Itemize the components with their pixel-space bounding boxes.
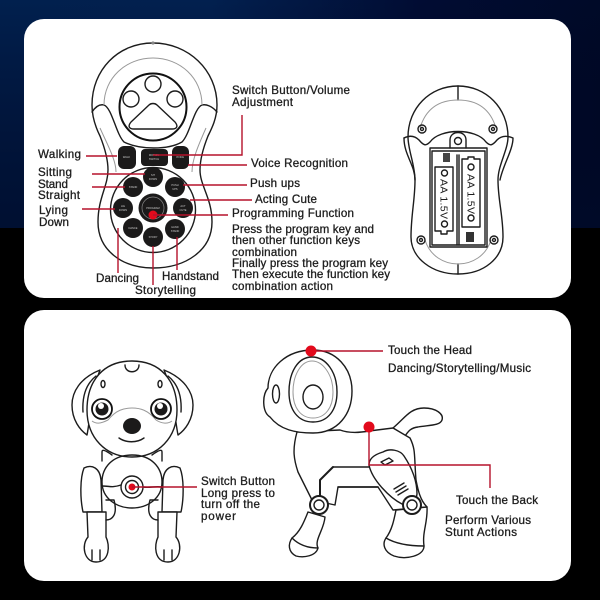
labels: dog: turn off the bbox=[201, 498, 260, 511]
labels: remote functions: Switch Button/Volume bbox=[232, 84, 350, 97]
battery labels: AA 1.5V bbox=[464, 174, 476, 214]
remote buttons: VOICE bbox=[176, 155, 184, 159]
labels: remote functions bbox=[38, 84, 390, 297]
labels: remote functions: Stand bbox=[38, 178, 68, 191]
remote buttons: SIT bbox=[151, 173, 155, 177]
panel: remote control bbox=[24, 19, 571, 298]
labels: dog: Dancing/Storytelling/Music bbox=[388, 362, 531, 375]
labels: dog: Stunt Actions bbox=[445, 526, 517, 539]
labels: remote functions: Acting Cute bbox=[255, 193, 317, 206]
labels: remote functions: Adjustment bbox=[232, 96, 294, 109]
labels: dog: Touch the Head bbox=[388, 344, 472, 357]
labels: remote functions: Lying bbox=[39, 204, 68, 217]
side view dog bbox=[264, 350, 442, 558]
remote buttons: PUSH bbox=[171, 183, 179, 187]
remote buttons: LIE bbox=[121, 204, 125, 208]
labels: dog: power bbox=[201, 510, 236, 523]
remote buttons: UPS bbox=[172, 187, 178, 191]
labels: dog: Switch Button bbox=[201, 475, 275, 488]
labels: remote functions: Press the program key and bbox=[232, 223, 374, 236]
labels: remote functions: Finally press the program key bbox=[232, 257, 388, 270]
callout line: switch bbox=[132, 486, 197, 488]
labels: remote functions: Sitting bbox=[38, 166, 72, 179]
labels: remote functions: Walking bbox=[38, 148, 81, 161]
labels: dog: Perform Various bbox=[445, 514, 531, 527]
labels: remote functions: Programming Function bbox=[232, 207, 354, 220]
labels: dog bbox=[201, 344, 538, 539]
front view dog bbox=[72, 361, 193, 562]
remote buttons: PROGRAM bbox=[146, 206, 160, 210]
labels: remote functions: Handstand bbox=[162, 270, 219, 283]
labels: remote functions: Push ups bbox=[250, 177, 300, 190]
labels: remote functions: Straight bbox=[38, 189, 81, 202]
labels: dog: Touch the Back bbox=[456, 494, 538, 507]
remote buttons: WALK bbox=[123, 155, 130, 159]
remote buttons: STAND bbox=[171, 229, 179, 233]
labels: remote functions: then other function keys bbox=[232, 234, 360, 247]
battery labels bbox=[438, 174, 476, 219]
labels: remote functions: Dancing bbox=[96, 272, 139, 285]
remote buttons: CUTE bbox=[179, 208, 187, 212]
labels: remote functions: combination bbox=[232, 246, 297, 259]
remote buttons: DOWN bbox=[119, 208, 127, 212]
labels: dog: Long press to bbox=[201, 487, 275, 500]
labels: remote functions: Storytelling bbox=[135, 284, 196, 297]
remote front illustration bbox=[92, 41, 217, 268]
remote buttons: STORY bbox=[149, 235, 158, 239]
labels: remote functions: Then execute the function key bbox=[232, 268, 390, 281]
remote buttons: MOTION bbox=[149, 153, 159, 157]
remote buttons: SWITCH bbox=[149, 157, 159, 161]
remote buttons: STAND bbox=[129, 185, 137, 189]
panel: dog touch points bbox=[24, 310, 571, 581]
remote buttons: DANCE bbox=[128, 226, 138, 230]
battery labels: AA 1.5V bbox=[438, 179, 450, 219]
callout lines: remote bbox=[82, 115, 252, 285]
remote back illustration bbox=[404, 86, 513, 274]
remote buttons: HAND bbox=[171, 225, 179, 229]
remote buttons bbox=[113, 146, 193, 247]
remote buttons: ACT bbox=[180, 204, 186, 208]
remote buttons: DOWN bbox=[149, 177, 157, 181]
paw pad bbox=[120, 74, 186, 140]
labels: remote functions: Down bbox=[39, 216, 69, 229]
red touch points and callout lines bbox=[306, 346, 490, 488]
labels: remote functions: combination action bbox=[232, 280, 333, 293]
labels: remote functions: Voice Recognition bbox=[251, 157, 348, 170]
